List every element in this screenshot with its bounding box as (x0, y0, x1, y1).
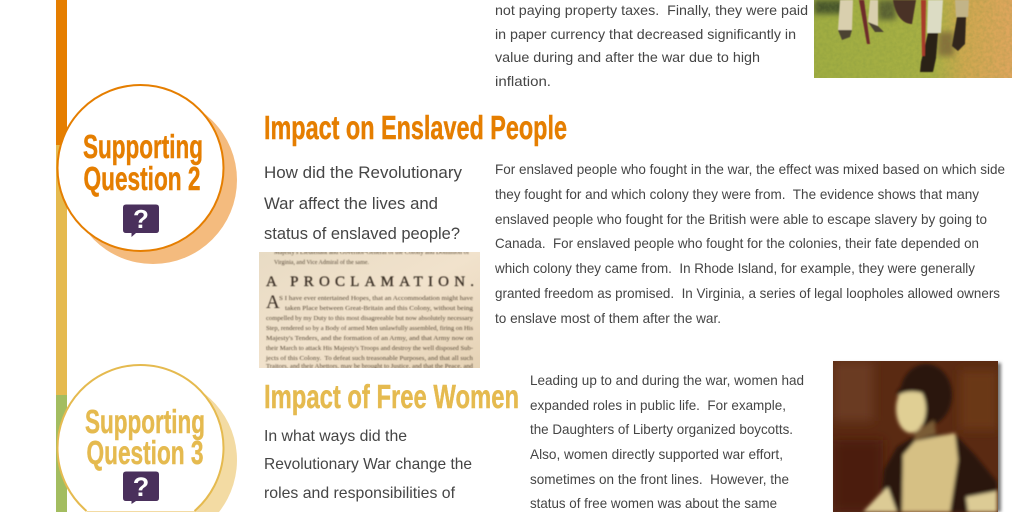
icon: question speech bubble: ? (133, 204, 149, 234)
badge: Supporting Question 3 (57, 365, 237, 512)
text block: enslaved people paragraph: which colony they came from. In Rhode Island, for example, they were generally (494, 260, 975, 276)
text block: enslaved people paragraph: Canada. For enslaved people who fought for the colonies, their fate depended on (495, 235, 979, 251)
text block: free women paragraph: Also, women directly supported war effort, (530, 446, 783, 462)
timeline bar: yellow segment (56, 145, 67, 395)
text block: end of previous section: not paying property taxes. Finally, they were paid (495, 2, 808, 18)
text block: enslaved people paragraph: to enslave most of them after the war. (495, 310, 721, 326)
text block: free women paragraph: sometimes on the front lines. However, the (530, 471, 789, 487)
text block: free women paragraph (530, 372, 804, 511)
badge circle (58, 85, 224, 251)
image: proclamation document: S I have ever entertained Hopes, that an Accommodation might have (279, 295, 473, 302)
text block: end of previous section: in paper currency that decreased significantly in (495, 26, 796, 42)
text block: end of previous section: value during and after the war due to high (495, 49, 760, 65)
text block: enslaved people paragraph: they fought for and which colony they were from. The evidence shows that many (495, 186, 979, 202)
badge shadow (69, 96, 237, 264)
text block: free women paragraph: the Daughters of Liberty organized boycotts. (530, 421, 793, 437)
image: proclamation document: taken Place between Great-Britain and this Colony, without being (285, 305, 474, 312)
badge label: Question 2 (84, 160, 200, 197)
timeline bar: orange segment (56, 0, 67, 145)
text block: question 3: Revolutionary War change the (264, 456, 472, 473)
image: proclamation document: Traitors, and their Abettors, may be brought to Justice, and that the Peace, and (266, 363, 474, 370)
icon: question speech bubble: ? (133, 472, 149, 502)
image: proclamation document: Majesty's Lieutenant and Governor-General of the Colony and Dominion of (274, 249, 470, 256)
image: proclamation document: compelled by my Duty to this most disagreeable but now absolutely necessary (266, 315, 474, 322)
text block: question 2: War affect the lives and (264, 194, 438, 213)
text block: free women paragraph: Leading up to and during the war, women had (530, 372, 804, 388)
icon: question speech bubble (123, 472, 159, 504)
text block: question 3 (264, 428, 472, 502)
text block: question 2: status of enslaved people? (264, 224, 460, 243)
image: proclamation document: A (266, 292, 280, 313)
heading: Impact on Enslaved People: Impact on Enslaved People (264, 109, 567, 146)
badge shadow (69, 376, 237, 512)
badge circle (57, 365, 223, 511)
badge label: Supporting (83, 128, 203, 165)
image: proclamation document: Majesty's Tenders, and the formation of an Army, and that Army now on (266, 335, 474, 342)
image: proclamation document: jects of this Colony. To defeat such treasonable Purposes, and that all such (265, 355, 474, 362)
image: proclamation document: Virginia, and Vice Admiral of the same. (274, 259, 369, 266)
image: proclamation document (259, 249, 480, 370)
text block: enslaved people paragraph (494, 161, 1005, 326)
badge label (83, 128, 203, 197)
image: portrait of a woman (833, 361, 1001, 512)
text block: free women paragraph: status of free women was about the same (530, 495, 777, 511)
timeline bar: green segment (56, 395, 67, 512)
text block: question 3: roles and responsibilities of (264, 485, 456, 502)
image: proclamation document: their March to attack His Majesty's Troops and destroy the well disposed Sub- (266, 345, 473, 352)
text block: enslaved people paragraph: For enslaved people who fought in the war, the effect was mixed based on which side (495, 161, 1005, 177)
icon: question speech bubble (123, 204, 159, 237)
text block: enslaved people paragraph: granted freedom as promised. In Virginia, a series of legal loopholes allowed owners (495, 285, 1000, 301)
image: soldiers painting (814, 0, 1012, 78)
heading: Impact of Free Women: Impact of Free Women (264, 378, 519, 415)
badge: Supporting Question 2 (58, 85, 237, 264)
image: proclamation document: Step, rendered so by a Body of armed Men unlawfully assembled, firing on His (266, 325, 473, 332)
text block: end of previous section (495, 2, 808, 89)
badge label: Question 3 (86, 434, 204, 471)
text block: end of previous section: inflation. (495, 73, 551, 89)
text block: question 2 (264, 163, 462, 243)
image: proclamation document: A PROCLAMATION. (266, 274, 474, 290)
text block: question 3: In what ways did the (264, 428, 407, 445)
badge label: Supporting (85, 403, 205, 440)
text block: free women paragraph: expanded roles in public life. For example, (530, 397, 786, 413)
text block: enslaved people paragraph: enslaved people who fought for the British were able to escape slavery by going to (495, 211, 987, 227)
badge label (85, 403, 205, 471)
text block: question 2: How did the Revolutionary (264, 163, 462, 182)
